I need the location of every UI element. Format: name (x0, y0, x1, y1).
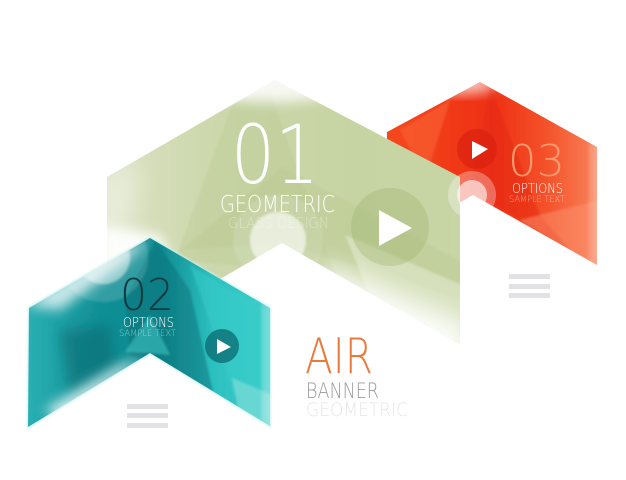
number 01: 01 (231, 109, 319, 203)
teal chevron shape (28, 238, 270, 427)
label: sample text: SAMPLE TEXT (509, 195, 565, 205)
menu lines: red panel (509, 274, 550, 298)
play button: green (351, 188, 429, 266)
teal chevron outline glow (28, 238, 270, 427)
infographic canvas (26, 80, 597, 429)
decoration: circles at red apex (448, 171, 496, 219)
number 02: 02 (120, 270, 174, 321)
number 03: 03 (508, 136, 565, 187)
panel: teal chevron 02 (26, 236, 272, 429)
subheading: geometric: GEOMETRIC (306, 399, 408, 421)
play button: red (457, 129, 497, 169)
play button: teal (205, 329, 239, 363)
label: sample text: SAMPLE TEXT (119, 329, 176, 339)
label: geometric: GEOMETRIC (220, 192, 335, 218)
title block (305, 328, 408, 421)
panel: green chevron 01 (107, 80, 460, 345)
green chevron shape (107, 80, 460, 345)
menu lines: teal panel (127, 404, 168, 428)
label: glass design: GLASS DESIGN (228, 214, 329, 232)
subheading: banner: BANNER (306, 379, 379, 403)
heading: air: AIR (305, 328, 373, 385)
label: options: OPTIONS (123, 316, 174, 331)
red chevron shape (387, 82, 597, 265)
label: options: OPTIONS (512, 182, 563, 197)
panel: red chevron 03 (380, 74, 605, 298)
